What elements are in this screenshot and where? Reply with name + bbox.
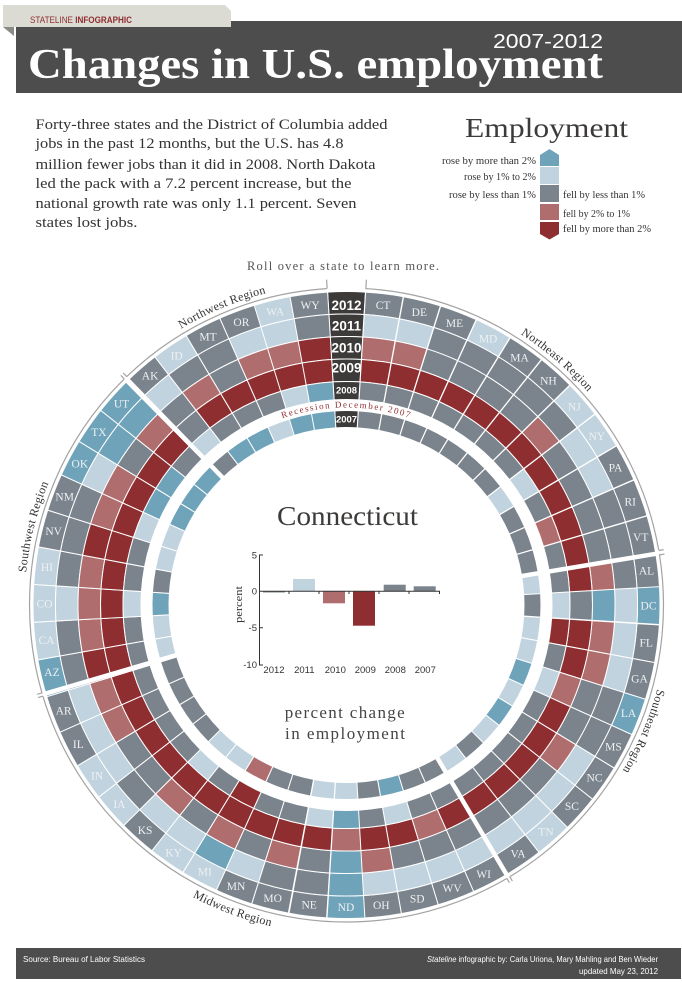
state: NY bbox=[483, 414, 617, 522]
state: KS: KS bbox=[138, 825, 152, 837]
state: MO: MO bbox=[263, 893, 282, 905]
state: OH bbox=[348, 779, 401, 919]
state: OR: OR bbox=[233, 317, 250, 329]
axis labels: 2011 bbox=[294, 665, 315, 676]
state: VT bbox=[515, 516, 656, 583]
region label: Southeast Region: Southeast Region bbox=[622, 690, 664, 772]
state: PA bbox=[496, 446, 634, 541]
region label: Northwest Region: Northwest Region bbox=[177, 288, 266, 329]
axis labels: 5 bbox=[252, 550, 257, 562]
state: MO bbox=[252, 772, 322, 914]
state: NJ bbox=[468, 385, 595, 503]
state: WI bbox=[411, 754, 508, 892]
state: NY: NY bbox=[588, 431, 606, 443]
year column: 2010 bbox=[331, 341, 362, 356]
axis labels: 2012 bbox=[263, 665, 285, 676]
state: LA bbox=[505, 651, 646, 735]
state: DC bbox=[524, 586, 660, 624]
state: NJ: NJ bbox=[568, 402, 581, 414]
state: MD: MD bbox=[479, 333, 497, 345]
state: DE bbox=[371, 296, 441, 438]
state: OH: OH bbox=[373, 900, 390, 912]
state: IL bbox=[59, 670, 198, 766]
axis labels: 2009 bbox=[355, 665, 376, 676]
state: NM bbox=[47, 475, 188, 559]
state: WI: WI bbox=[476, 869, 491, 881]
header tab: Stateline Infographic: STATELINE INFOGRAPHIC bbox=[30, 15, 132, 26]
state: ME bbox=[392, 305, 476, 446]
year column: 2007 bbox=[336, 415, 357, 426]
state: MD bbox=[413, 319, 510, 457]
state: AR: AR bbox=[56, 706, 72, 718]
state: MN: MN bbox=[227, 881, 246, 893]
footer bar bbox=[16, 948, 681, 979]
state: SC: SC bbox=[565, 801, 579, 813]
state: KS bbox=[123, 724, 242, 851]
state: HI: HI bbox=[41, 562, 53, 574]
bar chart: Connecticut percent change bbox=[233, 550, 440, 676]
state: WY: WY bbox=[301, 300, 320, 312]
state: PA: PA bbox=[609, 463, 623, 475]
state: MI: MI bbox=[198, 867, 212, 879]
state: WV: WV bbox=[443, 883, 462, 895]
state: FL bbox=[520, 608, 660, 663]
year column: 2009 bbox=[331, 361, 362, 376]
state: IL: IL bbox=[73, 739, 84, 751]
intro text block: states lost jobs. bbox=[36, 215, 138, 231]
region label: Northeast Region: Northeast Region bbox=[521, 328, 591, 392]
year column bbox=[328, 291, 365, 428]
state: AK bbox=[126, 356, 244, 484]
state: WA: WA bbox=[266, 307, 285, 319]
state: MN bbox=[216, 764, 300, 904]
state: IA: IA bbox=[113, 799, 126, 811]
state: AR bbox=[46, 649, 187, 732]
state: OK: OK bbox=[72, 458, 89, 470]
state: FL: FL bbox=[639, 637, 653, 649]
state: CO: CO bbox=[37, 598, 52, 610]
state: ND bbox=[327, 782, 365, 919]
state: AZ: AZ bbox=[44, 667, 60, 679]
legend: Employment: Employment bbox=[465, 113, 629, 143]
state: VA: VA bbox=[510, 849, 526, 861]
state: KY bbox=[152, 739, 261, 873]
radial chart: employment change by state and year bbox=[33, 291, 660, 919]
region outline arcs bbox=[30, 280, 664, 922]
state: MA bbox=[433, 337, 542, 471]
region label: Southwest Region: Southwest Region bbox=[18, 482, 48, 572]
axis labels bbox=[243, 550, 436, 676]
axis labels: -5 bbox=[249, 623, 257, 634]
year column: 2008 bbox=[336, 385, 357, 396]
state: CT bbox=[349, 292, 403, 431]
state: WV bbox=[391, 764, 474, 905]
title banner bbox=[16, 21, 682, 93]
state: MI bbox=[183, 753, 280, 891]
state: NV bbox=[38, 510, 179, 580]
state: MA: MA bbox=[510, 352, 530, 364]
state: GA: GA bbox=[631, 673, 648, 685]
state: NV: NV bbox=[45, 526, 63, 538]
state: IN: IN bbox=[91, 770, 104, 782]
state: MS bbox=[494, 671, 632, 768]
state: NE: NE bbox=[302, 900, 317, 912]
state: MS: MS bbox=[605, 741, 622, 753]
state: CO bbox=[33, 584, 169, 623]
title banner: Changes in U.S. employment bbox=[28, 42, 603, 88]
selected state title: Connecticut bbox=[277, 501, 419, 531]
state: IA bbox=[98, 708, 226, 826]
state: NC bbox=[481, 691, 615, 800]
state: AL bbox=[520, 550, 660, 603]
legend: Employment: rose by more than 2% bbox=[442, 156, 536, 167]
state: NH: NH bbox=[540, 375, 557, 387]
intro text block: jobs in the past 12 months, but the U.S. has 4.8 bbox=[34, 136, 344, 152]
state: TX: TX bbox=[91, 427, 107, 439]
state: MT: MT bbox=[199, 332, 217, 344]
state: NM: NM bbox=[55, 491, 74, 503]
state: TN bbox=[449, 726, 568, 853]
legend: Employment: fell by less than 1% bbox=[563, 190, 645, 201]
legend: Employment: rose by 1% to 2% bbox=[464, 172, 536, 183]
state: DE: DE bbox=[412, 307, 427, 319]
state: KY: KY bbox=[165, 848, 183, 860]
state: AZ bbox=[37, 628, 179, 697]
legend: Employment: rose by less than 1% bbox=[449, 190, 536, 201]
axes bbox=[260, 555, 440, 665]
header tab: Stateline Infographic bbox=[3, 5, 231, 36]
state: CA bbox=[33, 607, 173, 660]
intro text block: led the pack with a 7.2 percent increase, but the bbox=[36, 176, 352, 192]
recession marker label: Recession December 2007 bbox=[280, 402, 411, 418]
intro text block bbox=[34, 117, 388, 231]
bars bbox=[263, 579, 436, 626]
state: ND: ND bbox=[338, 902, 354, 914]
legend: Employment: fell by 2% to 1% bbox=[563, 209, 630, 220]
axis labels: 2010 bbox=[325, 665, 346, 676]
axis labels: 0 bbox=[252, 586, 257, 598]
instruction text: Roll over a state to learn more. bbox=[247, 259, 439, 273]
year column: 2011 bbox=[332, 318, 362, 334]
region label: Midwest Region: Midwest Region bbox=[192, 890, 271, 926]
axis labels: 2008 bbox=[385, 665, 406, 676]
footer bar: updated May 23, 2012 bbox=[579, 966, 658, 976]
state: NH bbox=[451, 359, 570, 486]
chart caption: in employment bbox=[285, 724, 405, 743]
state: OK bbox=[61, 441, 199, 539]
legend: Employment bbox=[442, 113, 651, 240]
state: AL: AL bbox=[639, 566, 654, 578]
state: HI bbox=[33, 547, 173, 602]
state: ID: ID bbox=[171, 350, 183, 362]
state: SD: SD bbox=[410, 894, 425, 906]
year column: 2012 bbox=[331, 298, 362, 313]
axis labels: 2007 bbox=[415, 665, 436, 676]
state: LA: LA bbox=[621, 708, 637, 720]
intro text block: million fewer jobs than it did in 2008. North Dakota bbox=[36, 157, 376, 173]
state: ID bbox=[155, 335, 263, 469]
title banner: 2007-2012 bbox=[493, 30, 603, 53]
state: OR bbox=[220, 305, 303, 445]
chart caption bbox=[285, 703, 405, 743]
state: TX bbox=[79, 410, 212, 519]
y axis title: percent bbox=[233, 586, 245, 623]
footer bar: Source: Bureau of Labor Statistics bbox=[23, 954, 145, 964]
state: GA bbox=[514, 630, 655, 699]
state: UT: UT bbox=[114, 399, 129, 411]
state: CT: CT bbox=[376, 300, 390, 312]
state: ME: ME bbox=[446, 318, 463, 330]
state: NE bbox=[289, 778, 343, 918]
chart caption: percent change bbox=[285, 703, 405, 722]
state: WA bbox=[254, 296, 323, 437]
intro text block: Forty-three states and the District of Columbia added bbox=[36, 117, 388, 133]
state: SC bbox=[466, 709, 593, 828]
state: DC: DC bbox=[641, 601, 657, 613]
axis labels: -10 bbox=[243, 660, 257, 671]
state: VT: VT bbox=[633, 532, 648, 544]
state: UT bbox=[100, 382, 227, 501]
footer bar: Stateline infographic by: Carla Uriona, Mary Mahling and Ben Wieder bbox=[427, 954, 658, 964]
state: RI bbox=[506, 480, 648, 562]
state: TN: TN bbox=[538, 827, 554, 839]
state: RI: RI bbox=[624, 497, 636, 509]
state: AK: AK bbox=[142, 371, 159, 383]
state: IN bbox=[77, 689, 211, 797]
state: SD bbox=[370, 773, 438, 914]
legend: Employment: fell by more than 2% bbox=[563, 224, 651, 235]
state: VA bbox=[431, 740, 539, 874]
intro text block: national growth rate was only 1.1 percent. Seven bbox=[36, 196, 357, 212]
state: WY bbox=[290, 292, 344, 431]
state: NC: NC bbox=[586, 772, 603, 784]
state: MT bbox=[186, 318, 282, 456]
state: CA: CA bbox=[39, 635, 55, 647]
